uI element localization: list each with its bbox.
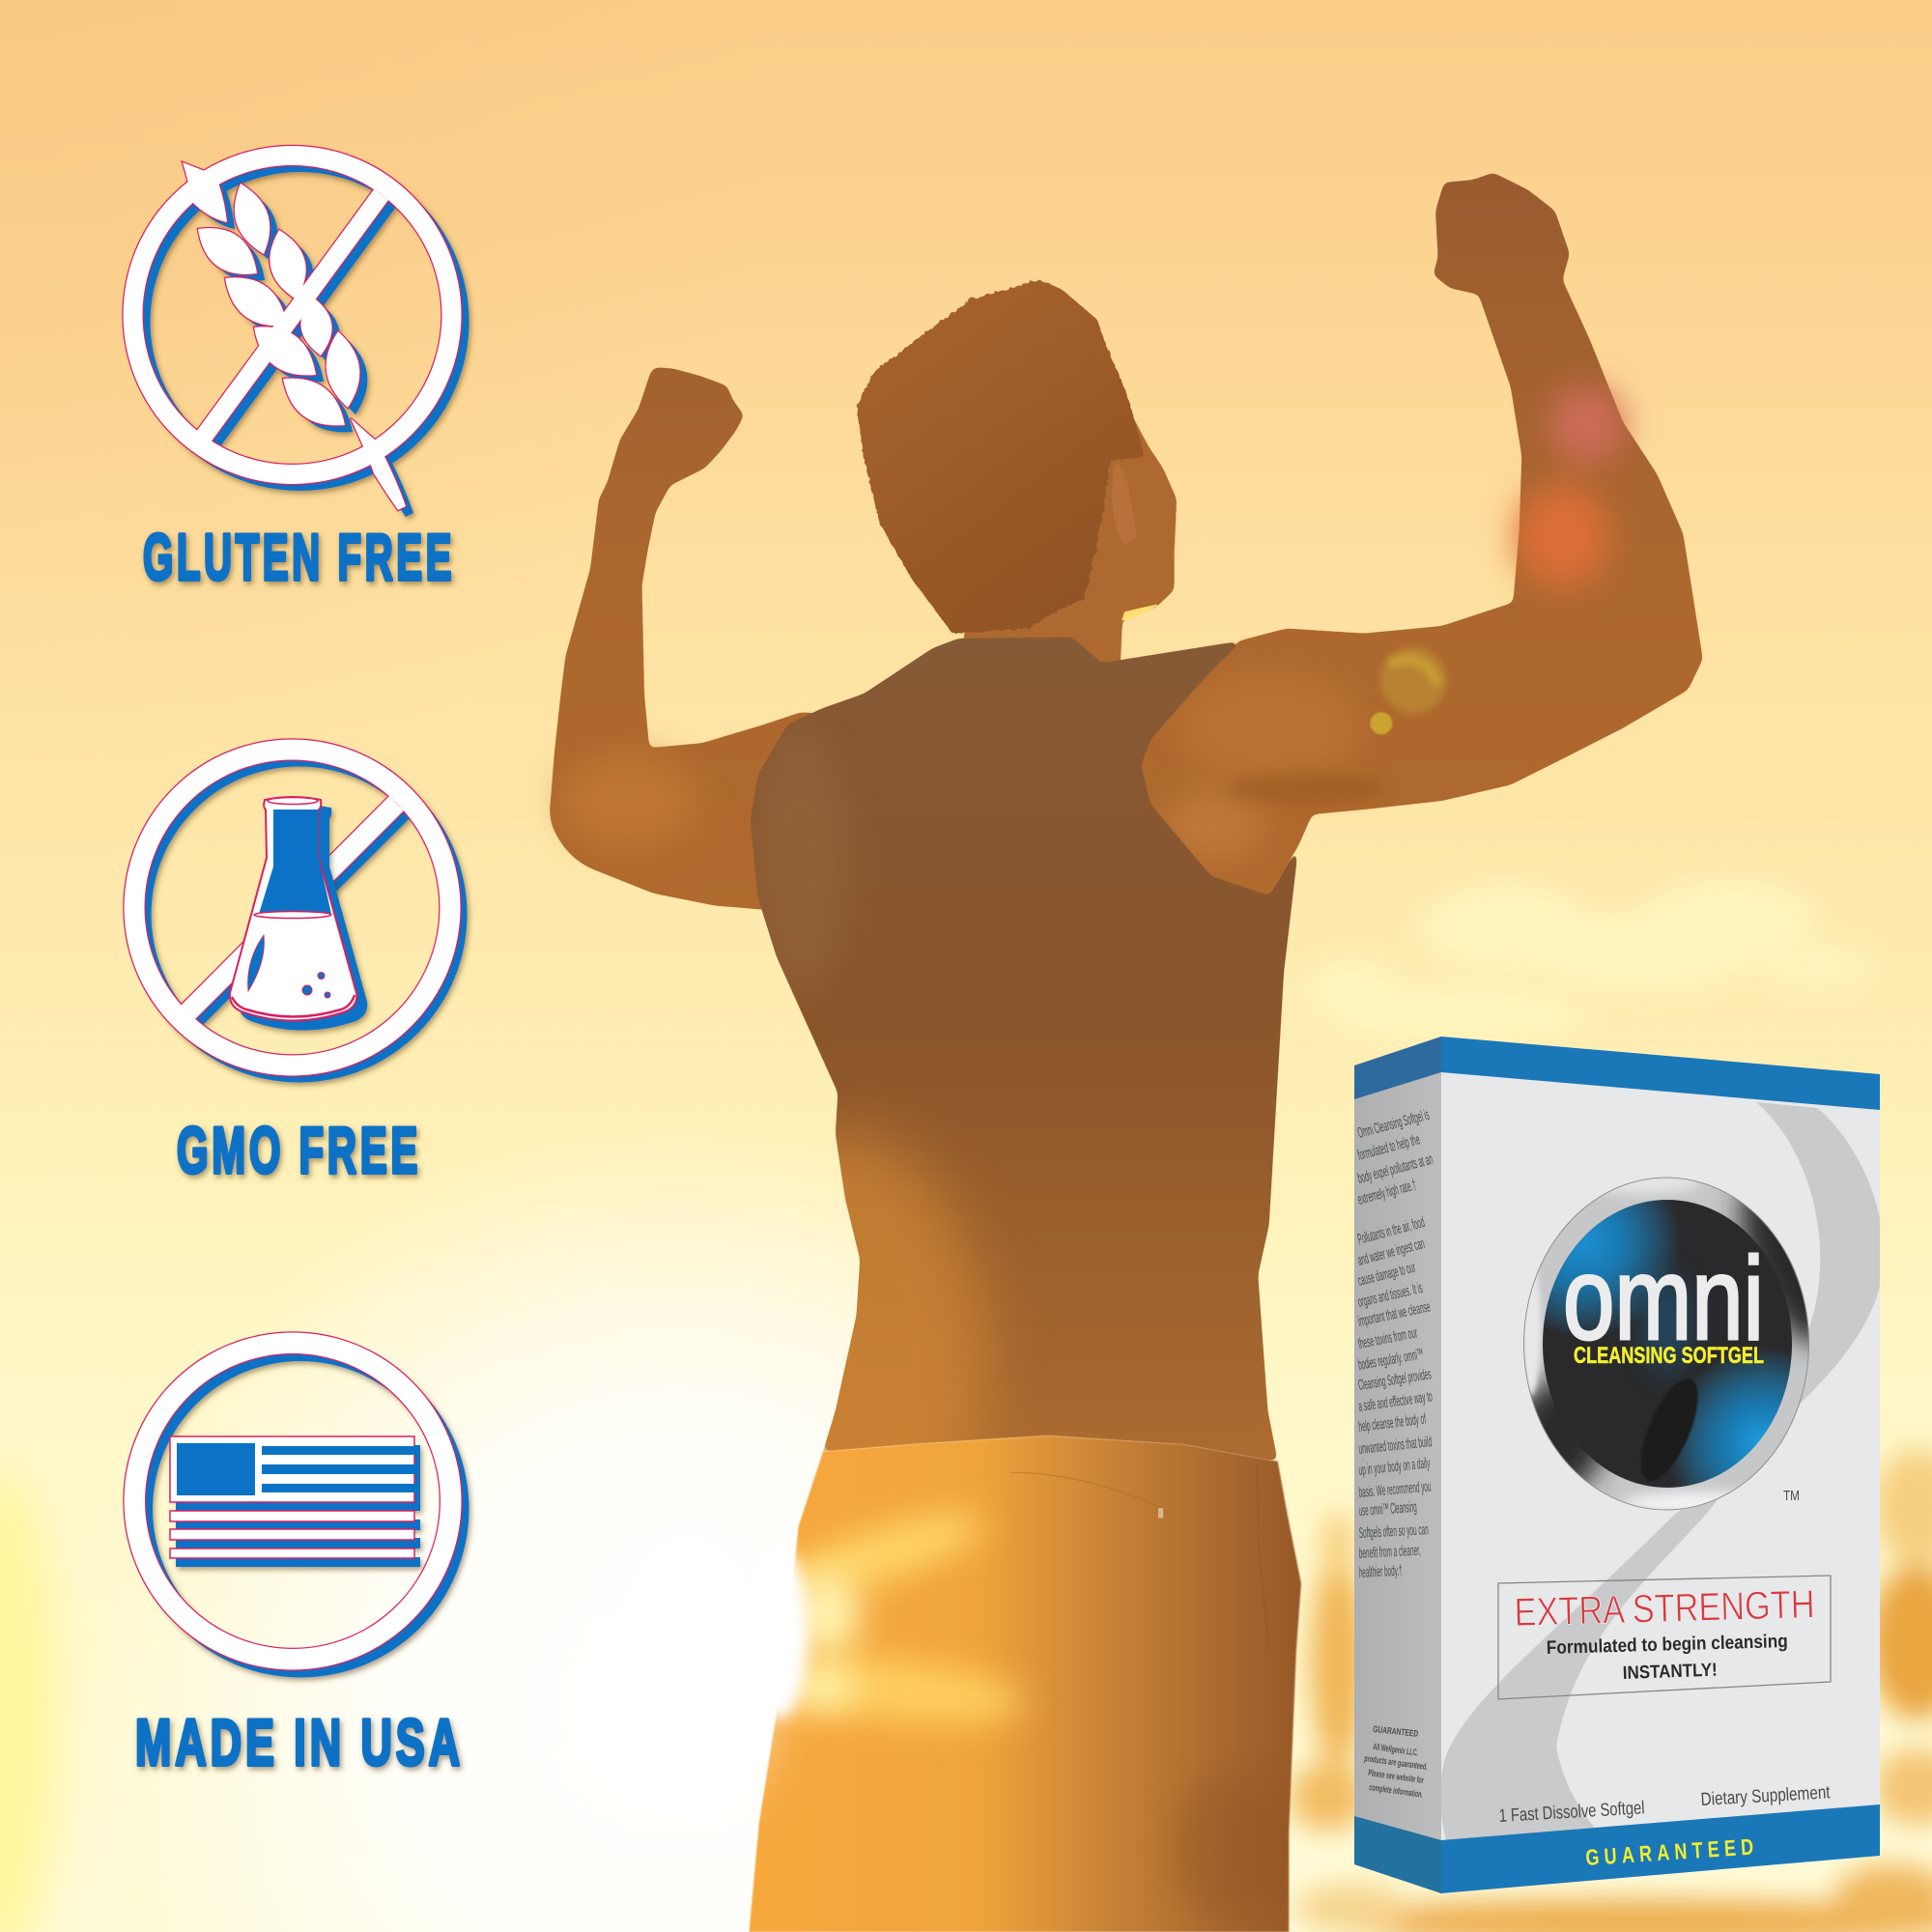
side panel description text: benefit from a cleaner,	[1358, 1543, 1421, 1562]
label: gmo free: GMO FREE	[177, 1114, 421, 1187]
omni logo	[1523, 1177, 1809, 1511]
sunset clouds lower right	[1290, 1449, 1932, 1932]
product box	[1354, 1037, 1884, 1893]
right raised arm and fist	[1109, 173, 1703, 895]
side panel guarantee text: Please see website for	[1368, 1768, 1425, 1786]
product box: unwanted toxins that build	[1358, 1434, 1433, 1458]
product box: basis. We recommend you	[1358, 1479, 1432, 1501]
ear	[1112, 461, 1137, 545]
box front panel	[1440, 1037, 1884, 1893]
product box: important that we cleanse	[1356, 1298, 1432, 1330]
left elbow highlight	[560, 754, 696, 848]
extra strength callout	[1498, 1576, 1831, 1699]
logo wordmark: omni	[1563, 1233, 1764, 1364]
extra strength callout: EXTRA STRENGTH	[1514, 1581, 1815, 1634]
logo face	[1536, 1193, 1797, 1492]
icon: crossed-out flask	[124, 739, 468, 1082]
extra strength callout: Formulated to begin cleansing	[1547, 1631, 1788, 1659]
trademark: TM	[1783, 1488, 1800, 1504]
hair	[856, 280, 1145, 634]
badge: gluten free	[124, 146, 469, 594]
box side panel: organs and tissues. It is	[1356, 1280, 1424, 1311]
shorts sunlight streaks	[774, 1499, 1293, 1922]
box side panel: Omni Cleansing Softgel is	[1356, 1107, 1432, 1142]
side panel description text: extremely high rate.†	[1356, 1177, 1418, 1208]
box side panel: help cleanse the body of	[1357, 1411, 1427, 1435]
product box: a safe and effective way to	[1357, 1388, 1434, 1415]
silver rim	[1523, 1177, 1809, 1511]
side panel description text	[1356, 1107, 1435, 1581]
shorts pocket and rivet	[1010, 1466, 1269, 1651]
extra strength callout: INSTANTLY!	[1622, 1661, 1718, 1684]
product box: Softgels often so you can	[1358, 1521, 1429, 1542]
icon: crossed-out wheat	[124, 146, 469, 517]
shorts	[750, 1435, 1301, 1932]
man flexing, seen from behind	[550, 173, 1703, 1932]
head and neck	[961, 407, 1177, 671]
side panel description text: healthier body.†	[1358, 1563, 1403, 1581]
softgel count: 1 Fast Dissolve Softgel	[1498, 1798, 1645, 1827]
side panel description text: these toxins from our	[1357, 1324, 1419, 1352]
box side panel	[1354, 1037, 1441, 1893]
badge: made in usa	[124, 1333, 469, 1779]
box side panel: and water we ingest can	[1356, 1236, 1427, 1269]
lens flare on forearm	[1370, 385, 1624, 734]
box side panel: Pollutants in the air, food	[1356, 1214, 1427, 1248]
side panel description text: use omni™ Cleansing	[1358, 1499, 1417, 1520]
box side panel: bodies regularly. omni™	[1357, 1346, 1425, 1374]
label: gluten free: GLUTEN FREE	[143, 521, 455, 594]
side panel description text: formulated to help the	[1356, 1131, 1422, 1164]
product box: Cleansing Softgel provides	[1357, 1366, 1433, 1394]
logo subtitle: CLEANSING SOFTGEL	[1574, 1343, 1764, 1369]
badge: gmo free	[124, 739, 468, 1187]
product box: up in your body on a daily	[1358, 1455, 1431, 1479]
side panel guarantee text: products are guaranteed.	[1364, 1753, 1428, 1773]
grey swoosh	[1440, 1102, 1884, 1850]
label: made in usa: MADE IN USA	[135, 1706, 464, 1779]
sun glare at waist	[616, 1528, 809, 1799]
guaranteed banner text: GUARANTEED	[1585, 1834, 1754, 1871]
side panel guarantee text: GUARANTEED	[1373, 1724, 1419, 1740]
sleeveless shirt	[751, 637, 1298, 1462]
rim light under jaw	[1122, 605, 1157, 620]
side panel guarantee text: All Wellgenix LLC.	[1373, 1742, 1419, 1759]
biceps highlight and shadow	[1164, 671, 1386, 860]
side panel guarantee text: complete information.	[1369, 1782, 1424, 1801]
side panel guarantee text	[1364, 1724, 1428, 1801]
dietary supplement: Dietary Supplement	[1700, 1782, 1832, 1810]
shirt sunlight from lower left	[690, 727, 985, 1577]
icon: american flag in ring	[124, 1333, 469, 1677]
softgel capsule	[1640, 1378, 1698, 1481]
product box: body expel pollutants at an	[1356, 1151, 1435, 1187]
side panel description text: cause damage to our	[1356, 1260, 1417, 1290]
left raised arm and fist	[550, 367, 838, 912]
